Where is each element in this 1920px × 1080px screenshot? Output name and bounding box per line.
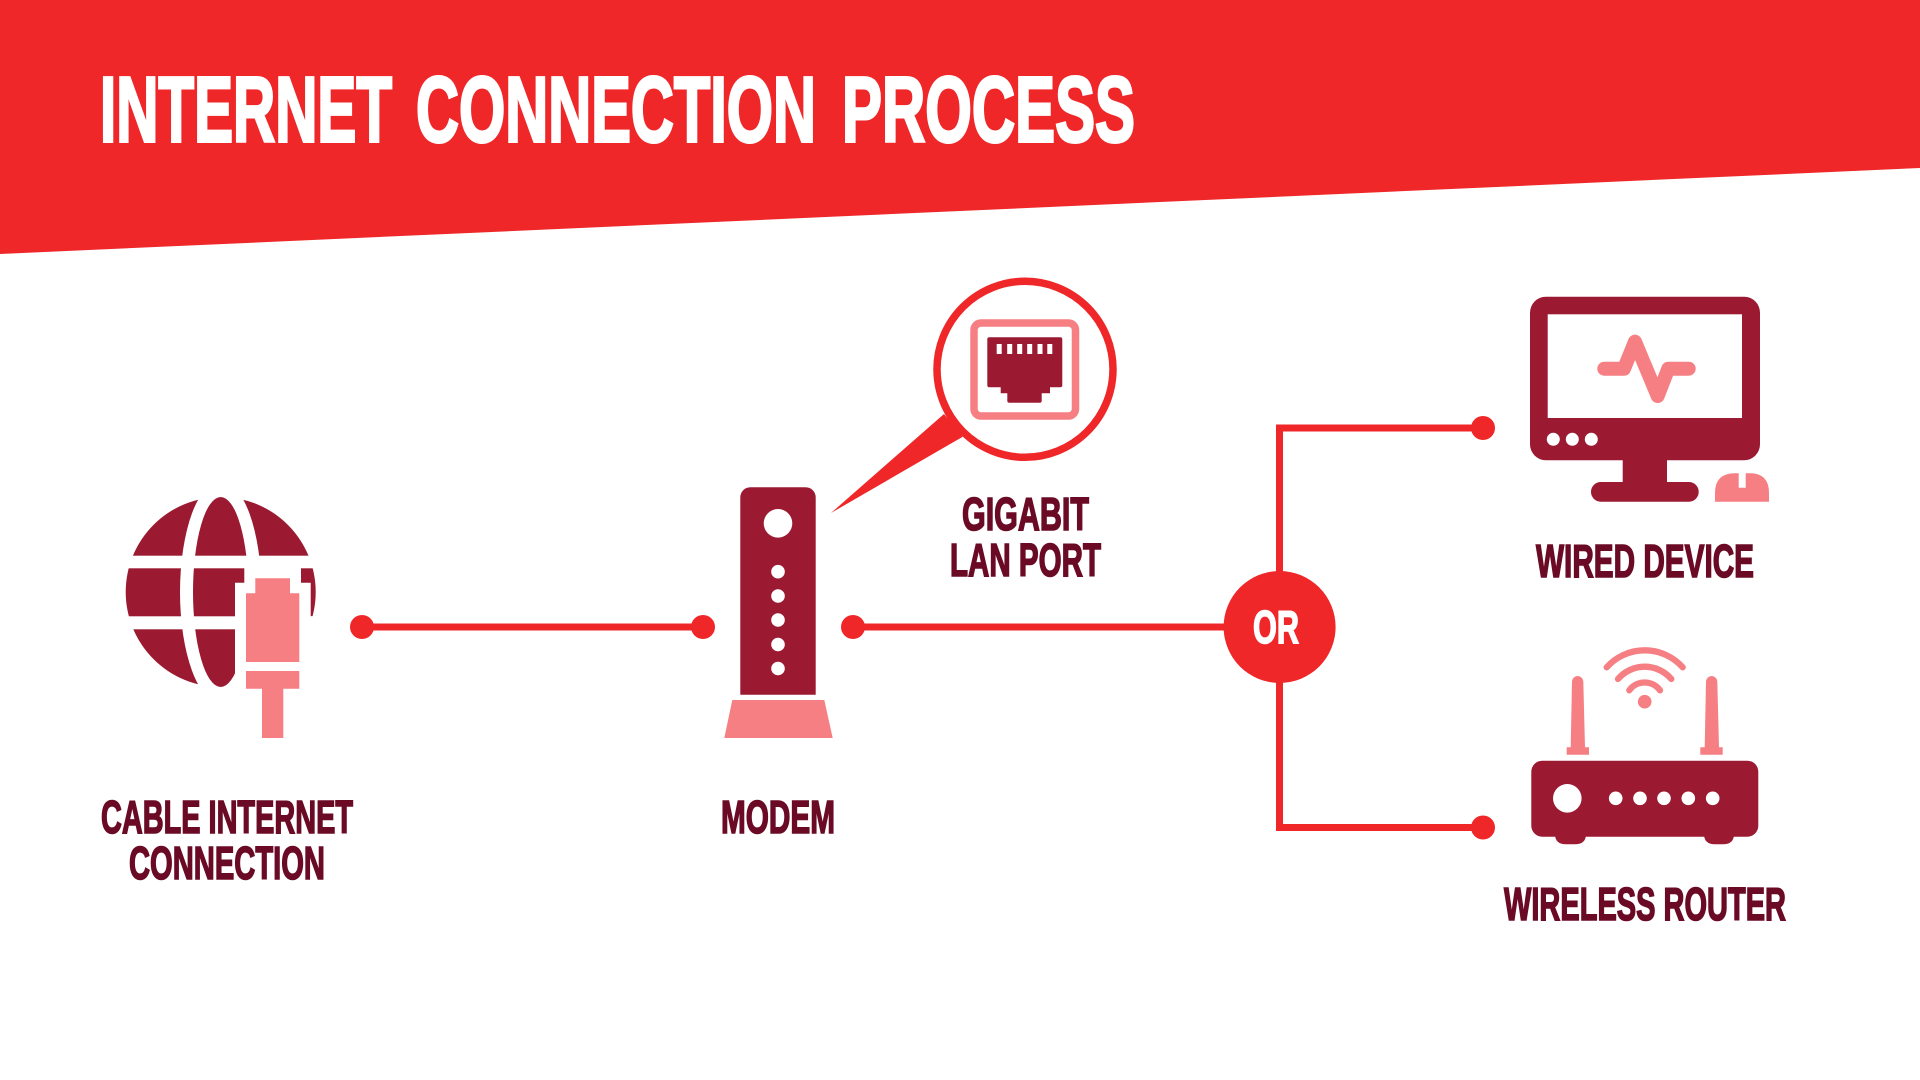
- label: modem: MODEM: [721, 791, 835, 843]
- icon: modem: [724, 487, 833, 738]
- title: CONNECTION: [416, 58, 816, 162]
- title: PROCESS: [842, 58, 1135, 162]
- icon: globe with cable plug: [110, 481, 330, 738]
- label: gigabit lan port: [950, 488, 1101, 586]
- label: cable internet connection: [101, 791, 353, 889]
- label: cable internet connection: CABLE INTERNET: [101, 791, 353, 843]
- title: [100, 58, 1135, 162]
- label: wired device: WIRED DEVICE: [1536, 535, 1754, 587]
- connector: cable to modem: [350, 615, 715, 639]
- icon: desktop monitor: [1530, 297, 1769, 502]
- label: gigabit lan port: LAN PORT: [950, 534, 1101, 586]
- callout: gigabit lan port: [831, 281, 1113, 513]
- connector: modem to split: [841, 615, 1240, 639]
- icon: ethernet port: [974, 323, 1076, 416]
- connector: branches to wired device and router: [1280, 416, 1495, 840]
- header banner: [0, 0, 1920, 254]
- or badge: [1224, 571, 1336, 683]
- label: cable internet connection: CONNECTION: [129, 837, 325, 889]
- label: gigabit lan port: GIGABIT: [962, 488, 1089, 540]
- or badge: OR: [1253, 601, 1299, 653]
- icon: wireless router: [1531, 650, 1758, 844]
- title: INTERNET: [100, 58, 392, 162]
